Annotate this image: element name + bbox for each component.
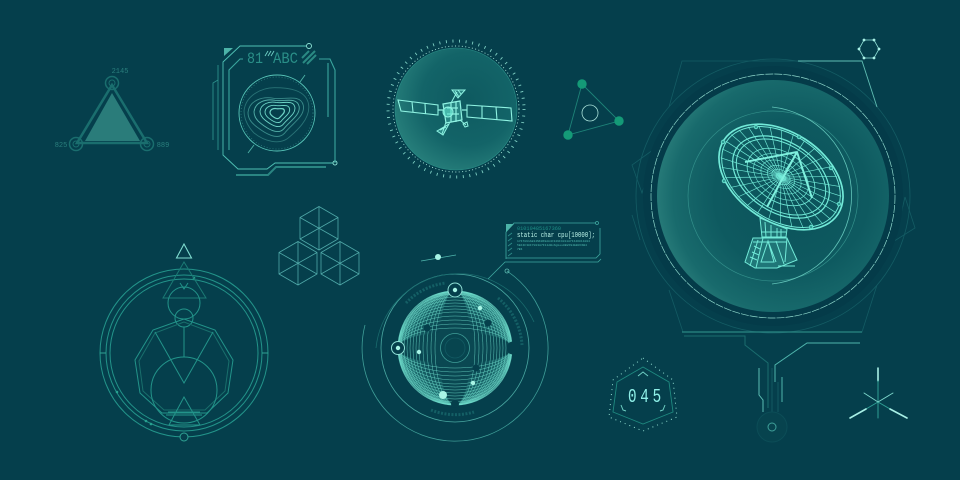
figure neck: [175, 309, 193, 327]
figure torso inner polygon: [139, 322, 229, 410]
right cube: [321, 242, 359, 285]
hexagon counter: [609, 358, 677, 431]
gauge node top: [106, 76, 118, 90]
contour lines: [244, 88, 309, 142]
left cube: [279, 242, 317, 285]
gauge label top: 2145: [112, 68, 128, 76]
connector top rail: [682, 331, 862, 333]
dish base struts: [750, 238, 795, 268]
ring bottom node: [180, 433, 188, 441]
dish struts: [745, 152, 812, 207]
counter hexagon: [613, 367, 673, 424]
star vertical arm: [877, 368, 879, 381]
sphere bright markers: [417, 306, 482, 399]
globe dotted ring: [393, 46, 519, 172]
sphere dark markers: [424, 320, 492, 372]
connector right trace: [775, 343, 860, 382]
figure spine: [183, 327, 185, 357]
callout number line: 01010485167360: [517, 225, 561, 232]
node circle centre: [582, 105, 598, 121]
dish ellipses: [700, 102, 862, 252]
left solar panel: [398, 100, 438, 115]
gauge node left: [70, 138, 82, 150]
dark ring: [643, 66, 903, 326]
corner marker: [224, 48, 233, 56]
figure head notch: [180, 283, 188, 289]
callout end node: [596, 222, 598, 224]
frame end node top: [306, 44, 312, 48]
star short arms: [864, 393, 893, 402]
sphere latitude lines: [398, 291, 512, 405]
callout corner marker: [506, 224, 514, 232]
contour outer circle: [239, 75, 315, 151]
figure top triangle icon: [176, 244, 192, 258]
callout side hatch: [508, 233, 512, 256]
callout fine print: 5EF4F30F7013A7F112Bx6gkeu0B2F94EB3C6B4: [517, 243, 587, 247]
thruster: [460, 120, 468, 127]
left side bar: [213, 65, 218, 150]
star right arm: [878, 402, 890, 409]
sphere orbit diagram: [362, 254, 548, 441]
callout fine print: 7B4: [517, 248, 523, 251]
figure rings: [100, 269, 268, 437]
panel heading slashes: [265, 51, 274, 56]
dish base: [745, 238, 797, 268]
triangle gauge outline: [77, 85, 147, 143]
node left: [563, 130, 573, 140]
connector side trace: [781, 377, 783, 402]
connector below dish: [682, 332, 862, 442]
bottom antenna: [437, 122, 449, 135]
connector dim traces: [772, 368, 778, 412]
top antenna: [451, 90, 465, 103]
contour dotted ring: [241, 77, 313, 149]
contour map panel: [213, 44, 337, 175]
star left arm: [866, 402, 878, 409]
contour ticks: [248, 75, 305, 153]
ring ticks: [100, 352, 268, 354]
frame end node bottom: [333, 161, 337, 165]
top cube: [300, 206, 338, 250]
satellite globe: [388, 41, 524, 177]
satellite: [398, 90, 512, 135]
outer polygon frame: [632, 59, 915, 333]
connector left trace: [684, 336, 768, 408]
counter corners: [621, 372, 665, 411]
globe tick ring: [388, 41, 524, 177]
dim orbit text band: [406, 283, 522, 415]
right solar panel: [467, 105, 512, 121]
gauge node right: [140, 138, 154, 150]
node right: [614, 116, 624, 126]
hex cube cluster: [279, 206, 359, 285]
node triangle lines: [568, 84, 619, 135]
figure head: [168, 287, 200, 319]
star left arm tip: [850, 409, 866, 418]
figure head triangle: [163, 262, 206, 298]
figure lower bars: [166, 412, 202, 415]
figure lower triangle: [169, 397, 200, 425]
thin ring: [651, 74, 895, 318]
panel heading numerals: 81: [247, 50, 263, 68]
callout leader: [488, 259, 601, 279]
callout frame: [506, 223, 600, 259]
ring figure: [100, 244, 268, 441]
sphere right node: [506, 342, 520, 354]
orbit arc end node: [505, 269, 509, 273]
sphere dark lenses: [398, 291, 512, 405]
callout code heading: static char cpu[10000];: [517, 232, 595, 240]
orbit rings: [362, 271, 548, 441]
figure V lines: [155, 332, 213, 383]
body core: [443, 107, 453, 117]
dish rim nodes: [721, 125, 841, 229]
connector inner trace: [759, 368, 763, 412]
triangle gauge filled core: [85, 93, 140, 141]
sphere bottom node: [451, 400, 459, 408]
figure torso polygon: [135, 319, 233, 413]
hexagon icon top right: [858, 39, 880, 59]
main disk: [657, 80, 889, 312]
bottom double bar: [236, 167, 326, 175]
panel inner frame: [229, 59, 335, 163]
hexagon outline: [859, 40, 879, 58]
callout fine print: [517, 240, 590, 251]
sphere left node: [392, 342, 404, 354]
gauge label right: 889: [157, 142, 169, 150]
dish column: [760, 218, 787, 237]
satellite body: [438, 101, 467, 123]
star vertical stem: [877, 381, 879, 418]
contour map: [239, 75, 315, 153]
sphere glow: [398, 290, 512, 406]
sphere top node: [448, 283, 462, 297]
inner ring: [688, 111, 858, 281]
globe disk: [395, 48, 517, 170]
hexagon nodes: [858, 39, 880, 59]
inner bright arc: [772, 107, 852, 284]
gauge label left: 825: [55, 142, 67, 150]
radar dish panel: [632, 59, 915, 333]
node top: [577, 79, 587, 89]
dish wireframe: [700, 102, 862, 268]
callout fine print: 1747891AE34NK069AA4C329F4011A7F44D011004: [517, 240, 590, 243]
three arm star: [850, 368, 907, 418]
counter value: 045: [628, 387, 665, 409]
ring dots: [116, 277, 195, 425]
small node triangle: [563, 79, 624, 140]
orbit satellite marker: [421, 254, 456, 261]
frame bright edge: [798, 61, 877, 107]
star right arm tip: [890, 409, 907, 418]
sphere core: [440, 334, 470, 362]
sphere longitude lines: [401, 291, 509, 405]
figure lower circle: [151, 357, 217, 423]
hatch block: [302, 51, 316, 64]
counter dotted hexagon: [609, 358, 677, 431]
panel outer frame: [223, 46, 333, 169]
code callout: [488, 222, 601, 279]
triangle gauge: [55, 68, 169, 150]
connector end node: [757, 412, 787, 442]
panel heading letters: ABC: [273, 50, 298, 68]
